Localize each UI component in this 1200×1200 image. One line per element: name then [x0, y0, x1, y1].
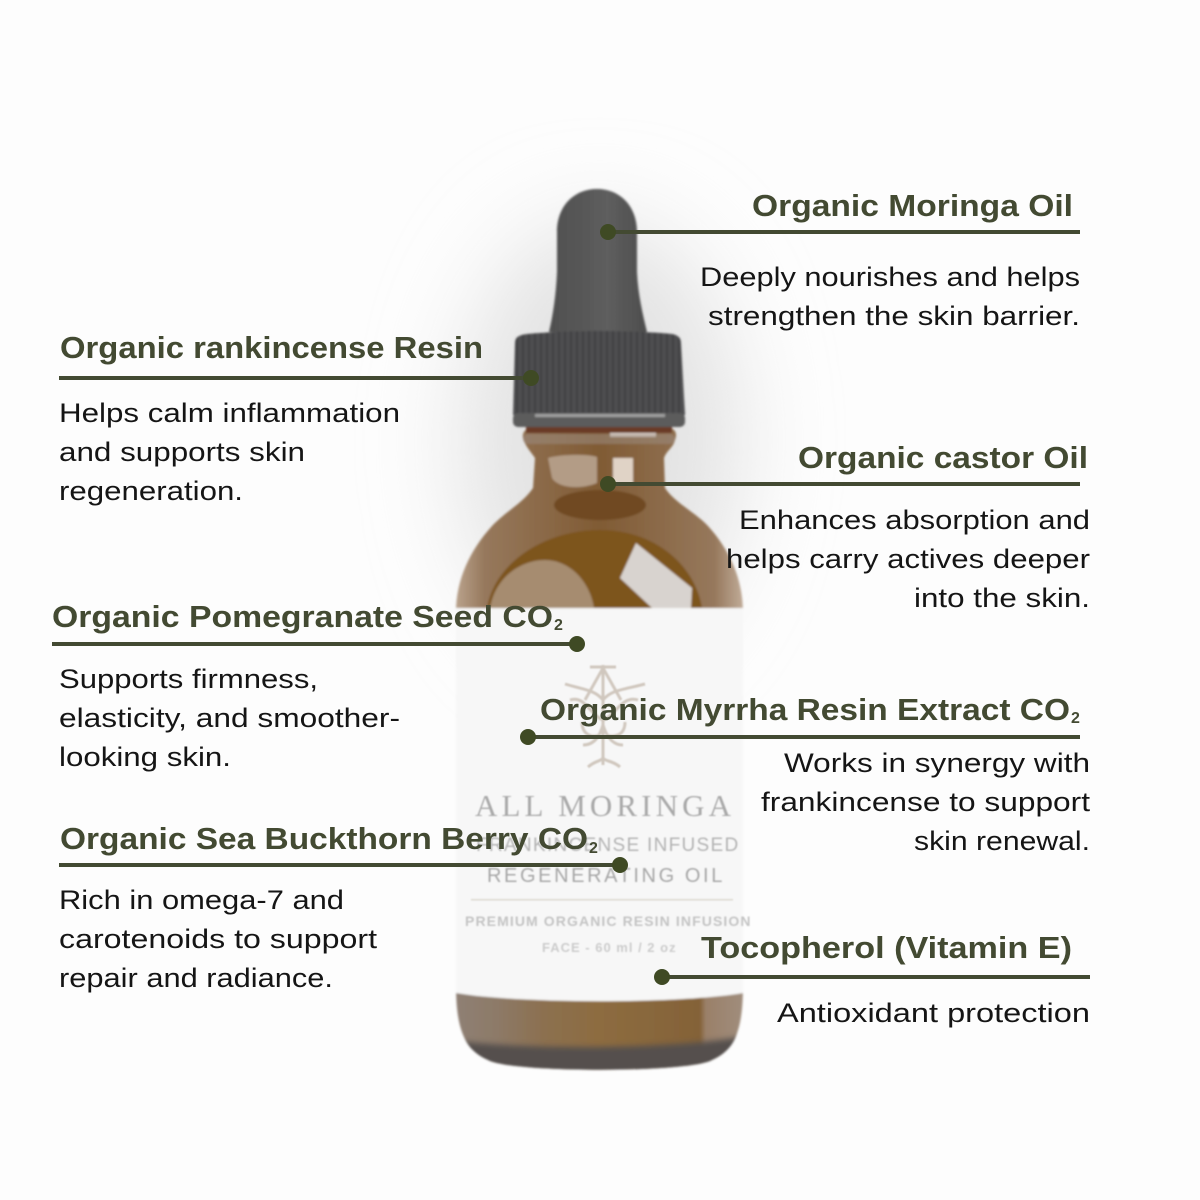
label text — [465, 788, 752, 955]
inner glass arc — [487, 530, 702, 608]
left round reflection — [490, 560, 594, 608]
callout: Organic Pomegranate Seed CO2: 2 — [554, 617, 563, 634]
callout: Organic castor Oil: into the skin. — [914, 583, 1090, 613]
callout: Organic Moringa Oil: Deeply nourishes and helps — [700, 262, 1080, 292]
bottle glass shoulder — [456, 428, 743, 612]
bottle base — [456, 985, 743, 1070]
callout: Organic Myrrha Resin Extract CO2: Works in synergy with — [784, 748, 1090, 778]
callout: Organic Myrrha Resin Extract CO2: skin renewal. — [914, 826, 1090, 856]
callout: Organic Sea Buckthorn Berry CO2: carotenoids to support — [59, 924, 378, 954]
callout: Organic castor Oil: Enhances absorption and — [739, 505, 1090, 535]
callout: Organic rankincense Resin: and supports skin — [59, 437, 305, 467]
label text: REGENERATING OIL — [487, 865, 725, 887]
pale neck collar — [523, 434, 675, 444]
callout: Organic castor Oil: helps carry actives deeper — [726, 544, 1090, 574]
callout: Organic Moringa Oil — [600, 188, 1080, 331]
right window reflection — [620, 543, 692, 608]
label text: PREMIUM ORGANIC RESIN INFUSION — [465, 913, 752, 929]
callout: Organic rankincense Resin: Helps calm inflammation — [59, 398, 400, 428]
callout: Organic Pomegranate Seed CO2: Supports firmness, — [59, 664, 318, 694]
callout: Organic Sea Buckthorn Berry CO2: Rich in omega-7 and — [59, 885, 344, 915]
callout: Tocopherol (Vitamin E) — [654, 930, 1090, 1028]
callout: Tocopherol (Vitamin E): Tocopherol (Vitamin E) — [701, 930, 1072, 965]
callout: Organic Pomegranate Seed CO2: elasticity, and smoother- — [59, 703, 400, 733]
label text: ALL MORINGA — [475, 788, 735, 823]
red neck band — [526, 426, 672, 433]
callout: Organic rankincense Resin: Organic rankincense Resin — [60, 330, 483, 365]
callout: Organic Myrrha Resin Extract CO2: frankincense to support — [761, 787, 1091, 817]
label text: FRANKINCENSE INFUSED — [476, 835, 740, 856]
label text: FACE - 60 ml / 2 oz — [542, 940, 677, 955]
callout: Organic Myrrha Resin Extract CO2: 2 — [1071, 710, 1080, 727]
callout: Organic rankincense Resin — [59, 330, 539, 506]
callout: Organic Sea Buckthorn Berry CO2: 2 — [589, 840, 598, 857]
dropper bulb — [549, 189, 647, 332]
label — [456, 608, 743, 1001]
callout: Organic Moringa Oil: strengthen the skin barrier. — [708, 301, 1080, 331]
neck highlight — [548, 455, 597, 487]
callout: Organic Myrrha Resin Extract CO2: Organic Myrrha Resin Extract CO — [540, 692, 1070, 727]
label logo ornament — [565, 665, 645, 767]
callout: Organic castor Oil: Organic castor Oil — [798, 440, 1088, 475]
callout: Organic Moringa Oil: Organic Moringa Oil — [752, 188, 1073, 223]
callout: Organic castor Oil — [600, 440, 1090, 613]
callout: Organic Pomegranate Seed CO2: Organic Pomegranate Seed CO — [52, 599, 553, 634]
cap ring — [513, 413, 685, 427]
bottle shadow halo — [460, 220, 740, 660]
dropper cap — [513, 331, 685, 415]
base shadow — [465, 1034, 737, 1071]
callout: Organic Pomegranate Seed CO2: looking skin. — [59, 742, 231, 772]
callout: Organic rankincense Resin: regeneration. — [59, 476, 243, 506]
callout: Organic Sea Buckthorn Berry CO2: Organic Sea Buckthorn Berry CO — [60, 821, 588, 856]
bottle photo — [450, 189, 752, 1080]
callout: Tocopherol (Vitamin E): Antioxidant protection — [777, 998, 1090, 1028]
callout: Organic Sea Buckthorn Berry CO2: repair and radiance. — [59, 963, 333, 993]
callout: Organic Myrrha Resin Extract CO2 — [520, 692, 1091, 856]
callout: Organic Pomegranate Seed CO2 — [52, 599, 585, 772]
callout: Organic Sea Buckthorn Berry CO2 — [59, 821, 628, 993]
dark reflection — [554, 490, 646, 520]
